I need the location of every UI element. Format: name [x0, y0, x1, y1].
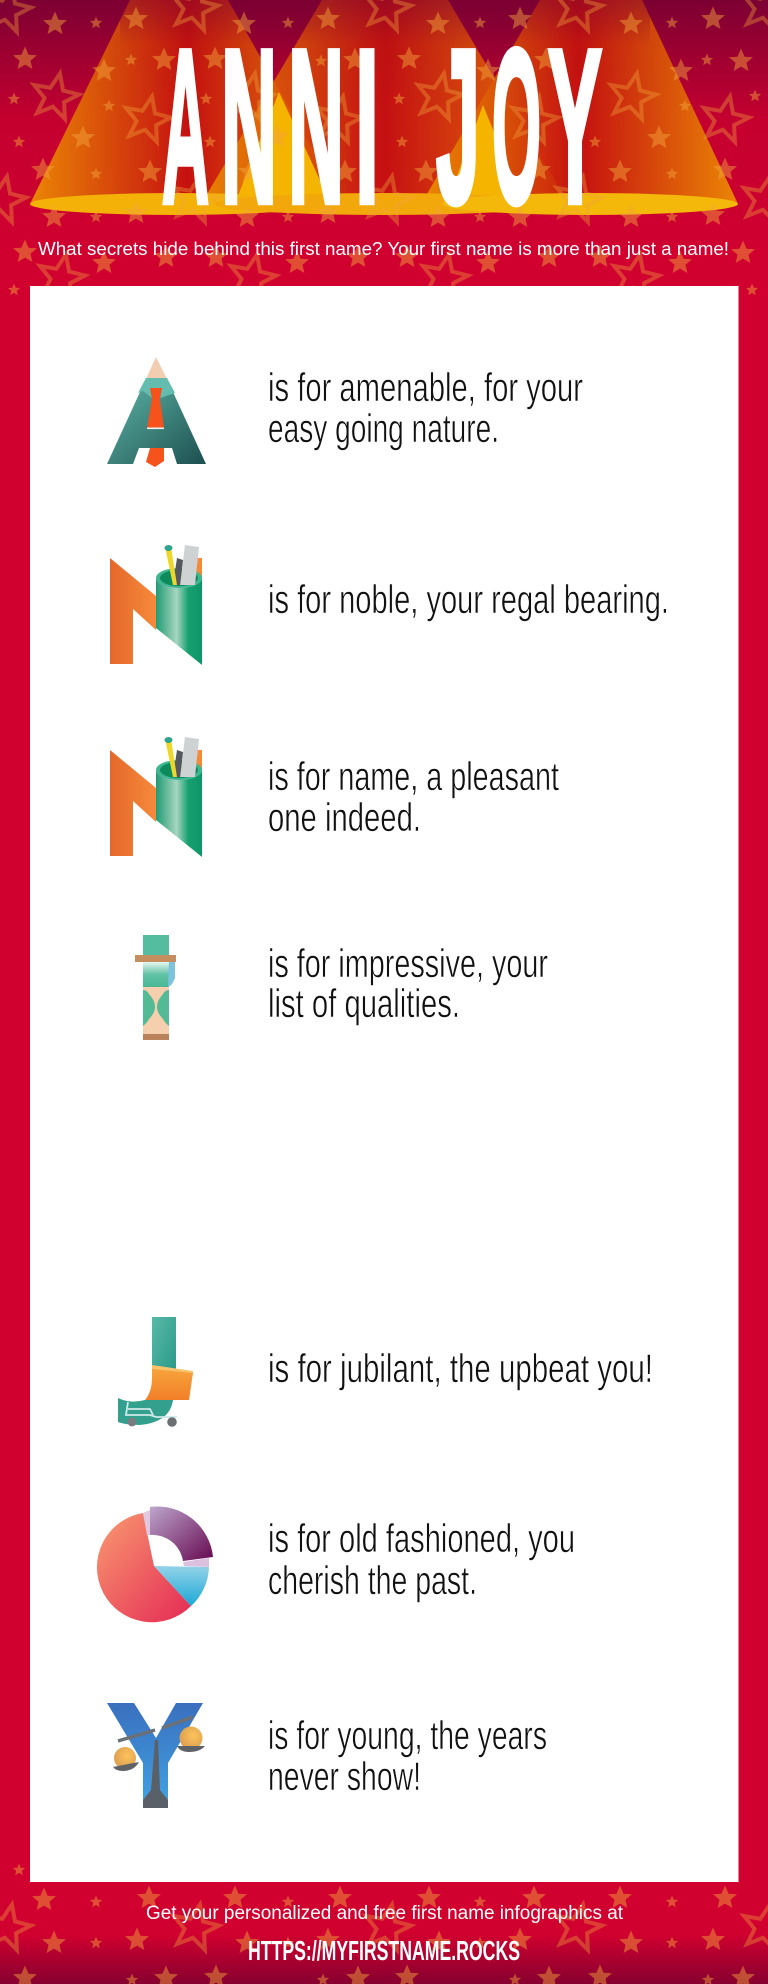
- title: A: [162, 5, 209, 249]
- text: Y: [268, 1714, 547, 1799]
- text: Y: [548, 5, 602, 249]
- icon: letter N with pen holder: [110, 545, 202, 665]
- icon: letter J with cart: [118, 1317, 193, 1427]
- text: Y: never show!: [268, 1755, 421, 1799]
- footer text: Get your personalized and free first name infographics at: [146, 1903, 624, 1924]
- panel: white content: [30, 286, 738, 1882]
- icon: letter I hourglass: [135, 935, 176, 1040]
- text: N name: [268, 755, 559, 840]
- icon: second letter N: [110, 737, 202, 857]
- subtitle: What secrets hide behind this first name? Your first name is more than just a name!: [38, 239, 729, 259]
- text: A: is for amenable, for your: [268, 366, 583, 410]
- text: O: is for old fashioned, you: [268, 1517, 575, 1561]
- text: N name: is for name, a pleasant: [268, 755, 559, 799]
- title: O: [492, 5, 541, 249]
- text: I: list of qualities.: [268, 982, 460, 1026]
- icon: letter O pie chart: [97, 1507, 213, 1622]
- title: I: [355, 5, 379, 249]
- text: N name: one indeed.: [268, 796, 421, 840]
- title: J: [436, 5, 480, 249]
- text: A: [268, 366, 583, 451]
- title: N: [288, 5, 344, 249]
- text: I: is for impressive, your: [268, 942, 548, 986]
- text: O: cherish the past.: [268, 1559, 477, 1603]
- footer link: HTTPS://MYFIRSTNAME.ROCKS: [248, 1935, 520, 1966]
- text: A: easy going nature.: [268, 407, 499, 451]
- text: I: [268, 942, 548, 1026]
- spotlights: [30, 0, 738, 215]
- text: Y: is for young, the years: [268, 1714, 547, 1758]
- icon: letter A with tie: [107, 357, 206, 467]
- icon: letter Y with scales: [107, 1703, 205, 1808]
- title: N: [221, 5, 277, 249]
- text: O: [268, 1517, 575, 1603]
